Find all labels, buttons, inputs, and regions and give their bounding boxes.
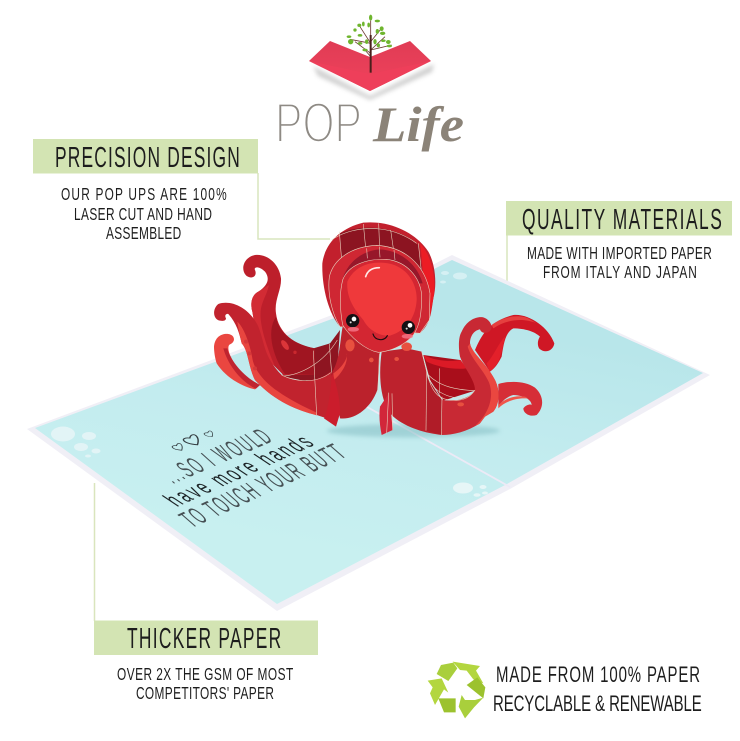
text: quality materials description bbox=[527, 244, 712, 283]
centre flap bbox=[379, 393, 393, 435]
heading bar: thicker paper bbox=[94, 620, 318, 655]
bubbles fold bbox=[453, 482, 488, 497]
eyes bbox=[346, 314, 415, 334]
icon: recycling arrows bbox=[428, 662, 485, 718]
back body left bbox=[275, 330, 340, 383]
card surface bbox=[35, 260, 703, 604]
text: made from 100% paper bbox=[493, 662, 702, 716]
body left highlight bbox=[333, 353, 347, 380]
logo book bbox=[309, 41, 431, 91]
text: quality materials description: MADE WITH IMPORTED PAPER bbox=[527, 244, 712, 264]
tentacle: lower left bbox=[214, 303, 340, 420]
head back inner bbox=[340, 228, 424, 283]
tentacle: upper left bbox=[243, 255, 315, 375]
back body right bbox=[423, 355, 475, 401]
panel: precision design bbox=[33, 139, 258, 244]
back body ribs right bbox=[428, 368, 475, 398]
panel: thicker paper bbox=[94, 620, 318, 704]
head back bbox=[322, 222, 435, 333]
tentacle: short left bbox=[214, 334, 260, 389]
logo wordmark bbox=[275, 91, 464, 155]
card fold bbox=[360, 403, 510, 487]
text: thicker paper description: COMPETITORS' PAPER bbox=[136, 684, 274, 704]
head front bbox=[340, 259, 422, 352]
body right bbox=[380, 348, 442, 435]
bubbles top-right bbox=[440, 271, 467, 284]
head middle layer bbox=[329, 245, 430, 333]
card message: TO TOUCH YOUR BUTT bbox=[172, 439, 353, 532]
heading: thicker paper: THICKER PAPER bbox=[127, 623, 281, 655]
card message: ...SO I WOULD bbox=[155, 424, 279, 488]
octopus bbox=[214, 222, 554, 437]
text: made from 100% paper: RECYCLABLE & RENEWABLE bbox=[493, 691, 702, 716]
tentacle: small right bbox=[498, 382, 542, 416]
octopus shadow bbox=[327, 424, 500, 437]
tentacle: main right bbox=[442, 317, 499, 435]
logo: Pop Life bbox=[275, 15, 464, 155]
pop-up card bbox=[27, 255, 710, 611]
text: precision design description: ASSEMBLED bbox=[106, 224, 181, 244]
cheeks bbox=[348, 327, 359, 332]
heading bar: precision design bbox=[33, 139, 258, 174]
head gloss bbox=[366, 268, 379, 277]
logo wordmark: POP bbox=[275, 91, 362, 155]
tentacle ribs left bbox=[282, 340, 337, 415]
body right lower panel bbox=[426, 377, 443, 435]
text: thicker paper description: OVER 2X THE GSM OF MOST bbox=[117, 665, 293, 685]
text: made from 100% paper: MADE FROM 100% PAPER bbox=[496, 662, 700, 687]
bubbles bottom-left bbox=[51, 426, 100, 458]
card border bbox=[27, 255, 710, 611]
text: precision design description bbox=[61, 185, 227, 244]
mouth bbox=[373, 334, 387, 340]
flap left bbox=[324, 372, 340, 427]
heading: precision design: PRECISION DESIGN bbox=[55, 142, 240, 174]
heading: quality materials: QUALITY MATERIALS bbox=[522, 204, 722, 236]
text: quality materials description: FROM ITALY AND JAPAN bbox=[543, 263, 697, 283]
tentacle: back right bbox=[475, 315, 554, 372]
text: precision design description: LASER CUT AND HAND bbox=[74, 205, 212, 225]
logo book shadow bbox=[313, 64, 434, 100]
head middle dark cells bbox=[343, 249, 423, 283]
hearts bbox=[171, 431, 215, 452]
text: thicker paper description bbox=[117, 665, 293, 704]
body ribs and highlights bbox=[345, 339, 475, 435]
connector lines bbox=[94, 173, 507, 621]
face panel bbox=[347, 263, 417, 336]
card message: have more hands bbox=[156, 431, 321, 510]
logo wordmark: Life bbox=[372, 96, 464, 152]
body left bbox=[332, 327, 380, 418]
heading bar: quality materials bbox=[506, 201, 732, 236]
text: precision design description: OUR POP UPS ARE 100% bbox=[61, 185, 227, 205]
panel: quality materials bbox=[506, 201, 732, 283]
logo tree bbox=[347, 15, 392, 73]
head ribs bbox=[332, 223, 423, 283]
